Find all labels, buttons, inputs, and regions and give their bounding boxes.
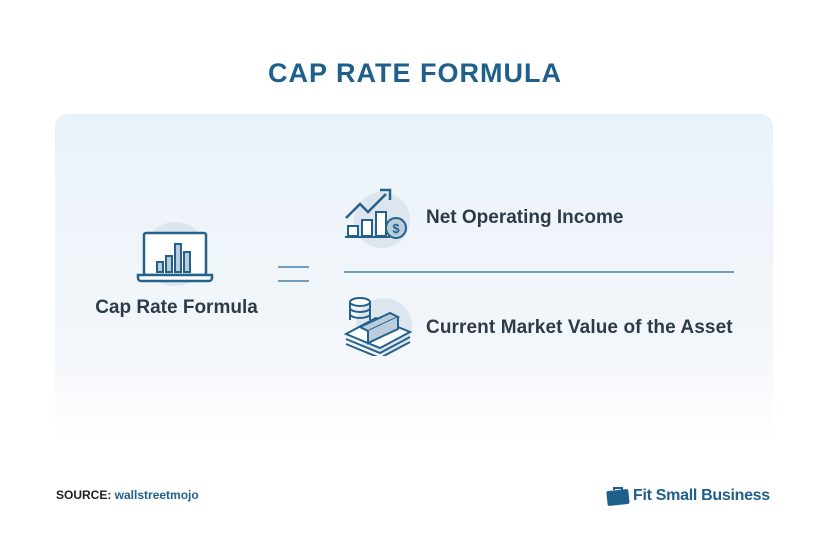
fraction line	[344, 271, 734, 273]
title: CAP RATE FORMULA	[268, 58, 562, 88]
icon: briefcase	[606, 487, 630, 506]
source: SOURCE: wallstreetmojo	[56, 488, 199, 502]
logo: Fit Small Business: Fit Small Business	[633, 487, 770, 504]
label: Current Market Value of the Asset: Current Market Value of the Asset	[426, 317, 733, 338]
icon: growth chart dollar	[345, 188, 410, 248]
panel: formula	[55, 114, 773, 444]
icon: money stack	[344, 297, 412, 356]
icon: growth chart dollar: $	[392, 221, 400, 236]
label: Cap Rate Formula: Cap Rate Formula	[95, 297, 258, 318]
icon: laptop chart	[136, 222, 214, 286]
label: Net Operating Income: Net Operating Income	[426, 207, 623, 228]
equals sign	[278, 266, 309, 282]
